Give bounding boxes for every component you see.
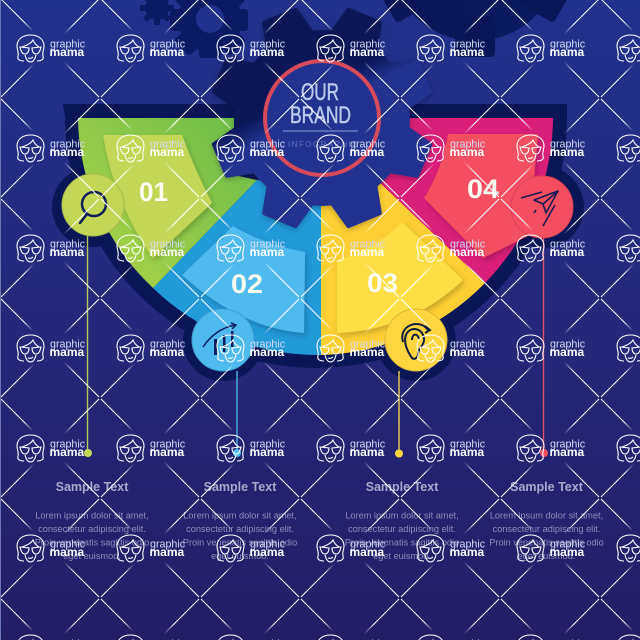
body text 4 [489, 510, 604, 561]
brand badge [265, 61, 379, 175]
yellow inner panel [337, 222, 463, 333]
body text 2: Lorem ipsum dolor sit amet, [183, 510, 297, 520]
body text 3: consectetur adipiscing elit. [348, 524, 456, 534]
green inner panel [103, 135, 212, 258]
body text 2: consectetur adipiscing elit. [186, 524, 294, 534]
brand title [290, 79, 351, 129]
icon circle 01: magnifier [62, 174, 124, 236]
segment numbers: 02 [231, 269, 263, 299]
segment numbers: 03 [367, 268, 398, 298]
body text 3 [345, 510, 459, 561]
icon: large top right gear [377, 0, 573, 57]
body text 1: Proin venenatis sagittis odio [35, 538, 149, 548]
body text 4: Lorem ipsum dolor sit amet, [490, 510, 603, 520]
body text 2 [183, 510, 297, 561]
connector: green [84, 236, 92, 457]
text column 3: Sample Text [366, 480, 439, 494]
body text 1: consectetur adipiscing elit. [38, 524, 146, 534]
blue inner panel [182, 226, 305, 333]
body text 3: Proin venenatis sagittis odio [345, 538, 459, 548]
connector: yellow [395, 371, 403, 458]
central gear [210, 8, 434, 232]
body text 4: eget euismod. [518, 551, 575, 561]
text column 2: Sample Text [204, 480, 277, 494]
connector: red [540, 237, 548, 457]
icon: small gear [140, 0, 174, 25]
brand title: BRAND [290, 102, 351, 129]
red inner panel [424, 134, 538, 258]
segment numbers: 04 [467, 174, 499, 204]
body text 4: consectetur adipiscing elit. [493, 524, 600, 534]
text column 4 [489, 480, 604, 561]
icon circle 03: ear with arrow [385, 309, 447, 371]
brand subtitle: INFOGRAPHIC [288, 140, 358, 149]
text column 1 [35, 480, 149, 561]
brand title: OUR [301, 79, 339, 106]
body text 1: Lorem ipsum dolor sit amet, [35, 510, 149, 520]
body text 4: Proin venenatis sagittis odio [489, 538, 604, 548]
text column 2 [183, 480, 297, 561]
segment 03: yellow [321, 178, 485, 355]
body text 1 [35, 510, 149, 561]
body text 3: eget euismod. [373, 551, 431, 561]
icon circle 02: growth chart [192, 309, 254, 371]
background gears [140, 0, 573, 58]
segment numbers: 01 [139, 177, 168, 207]
body text 2: Proin venenatis sagittis odio [183, 538, 297, 548]
body text 3: Lorem ipsum dolor sit amet, [345, 510, 459, 520]
segment 04: red [375, 118, 553, 283]
text column 1: Sample Text [56, 480, 129, 494]
text column 3 [345, 480, 459, 561]
body text 2: eget euismod. [211, 551, 269, 561]
icon circle 04: paper plane [511, 176, 573, 238]
text column 4: Sample Text [510, 480, 584, 494]
segment 02: blue [153, 180, 321, 355]
badge ring [265, 61, 379, 175]
body text 1: eget euismod. [63, 551, 121, 561]
icon: medium gear [170, 0, 248, 58]
segment 01: green [78, 118, 257, 288]
connector: blue [233, 371, 241, 457]
segment numbers [139, 174, 499, 299]
dark fan backing [52, 104, 584, 381]
